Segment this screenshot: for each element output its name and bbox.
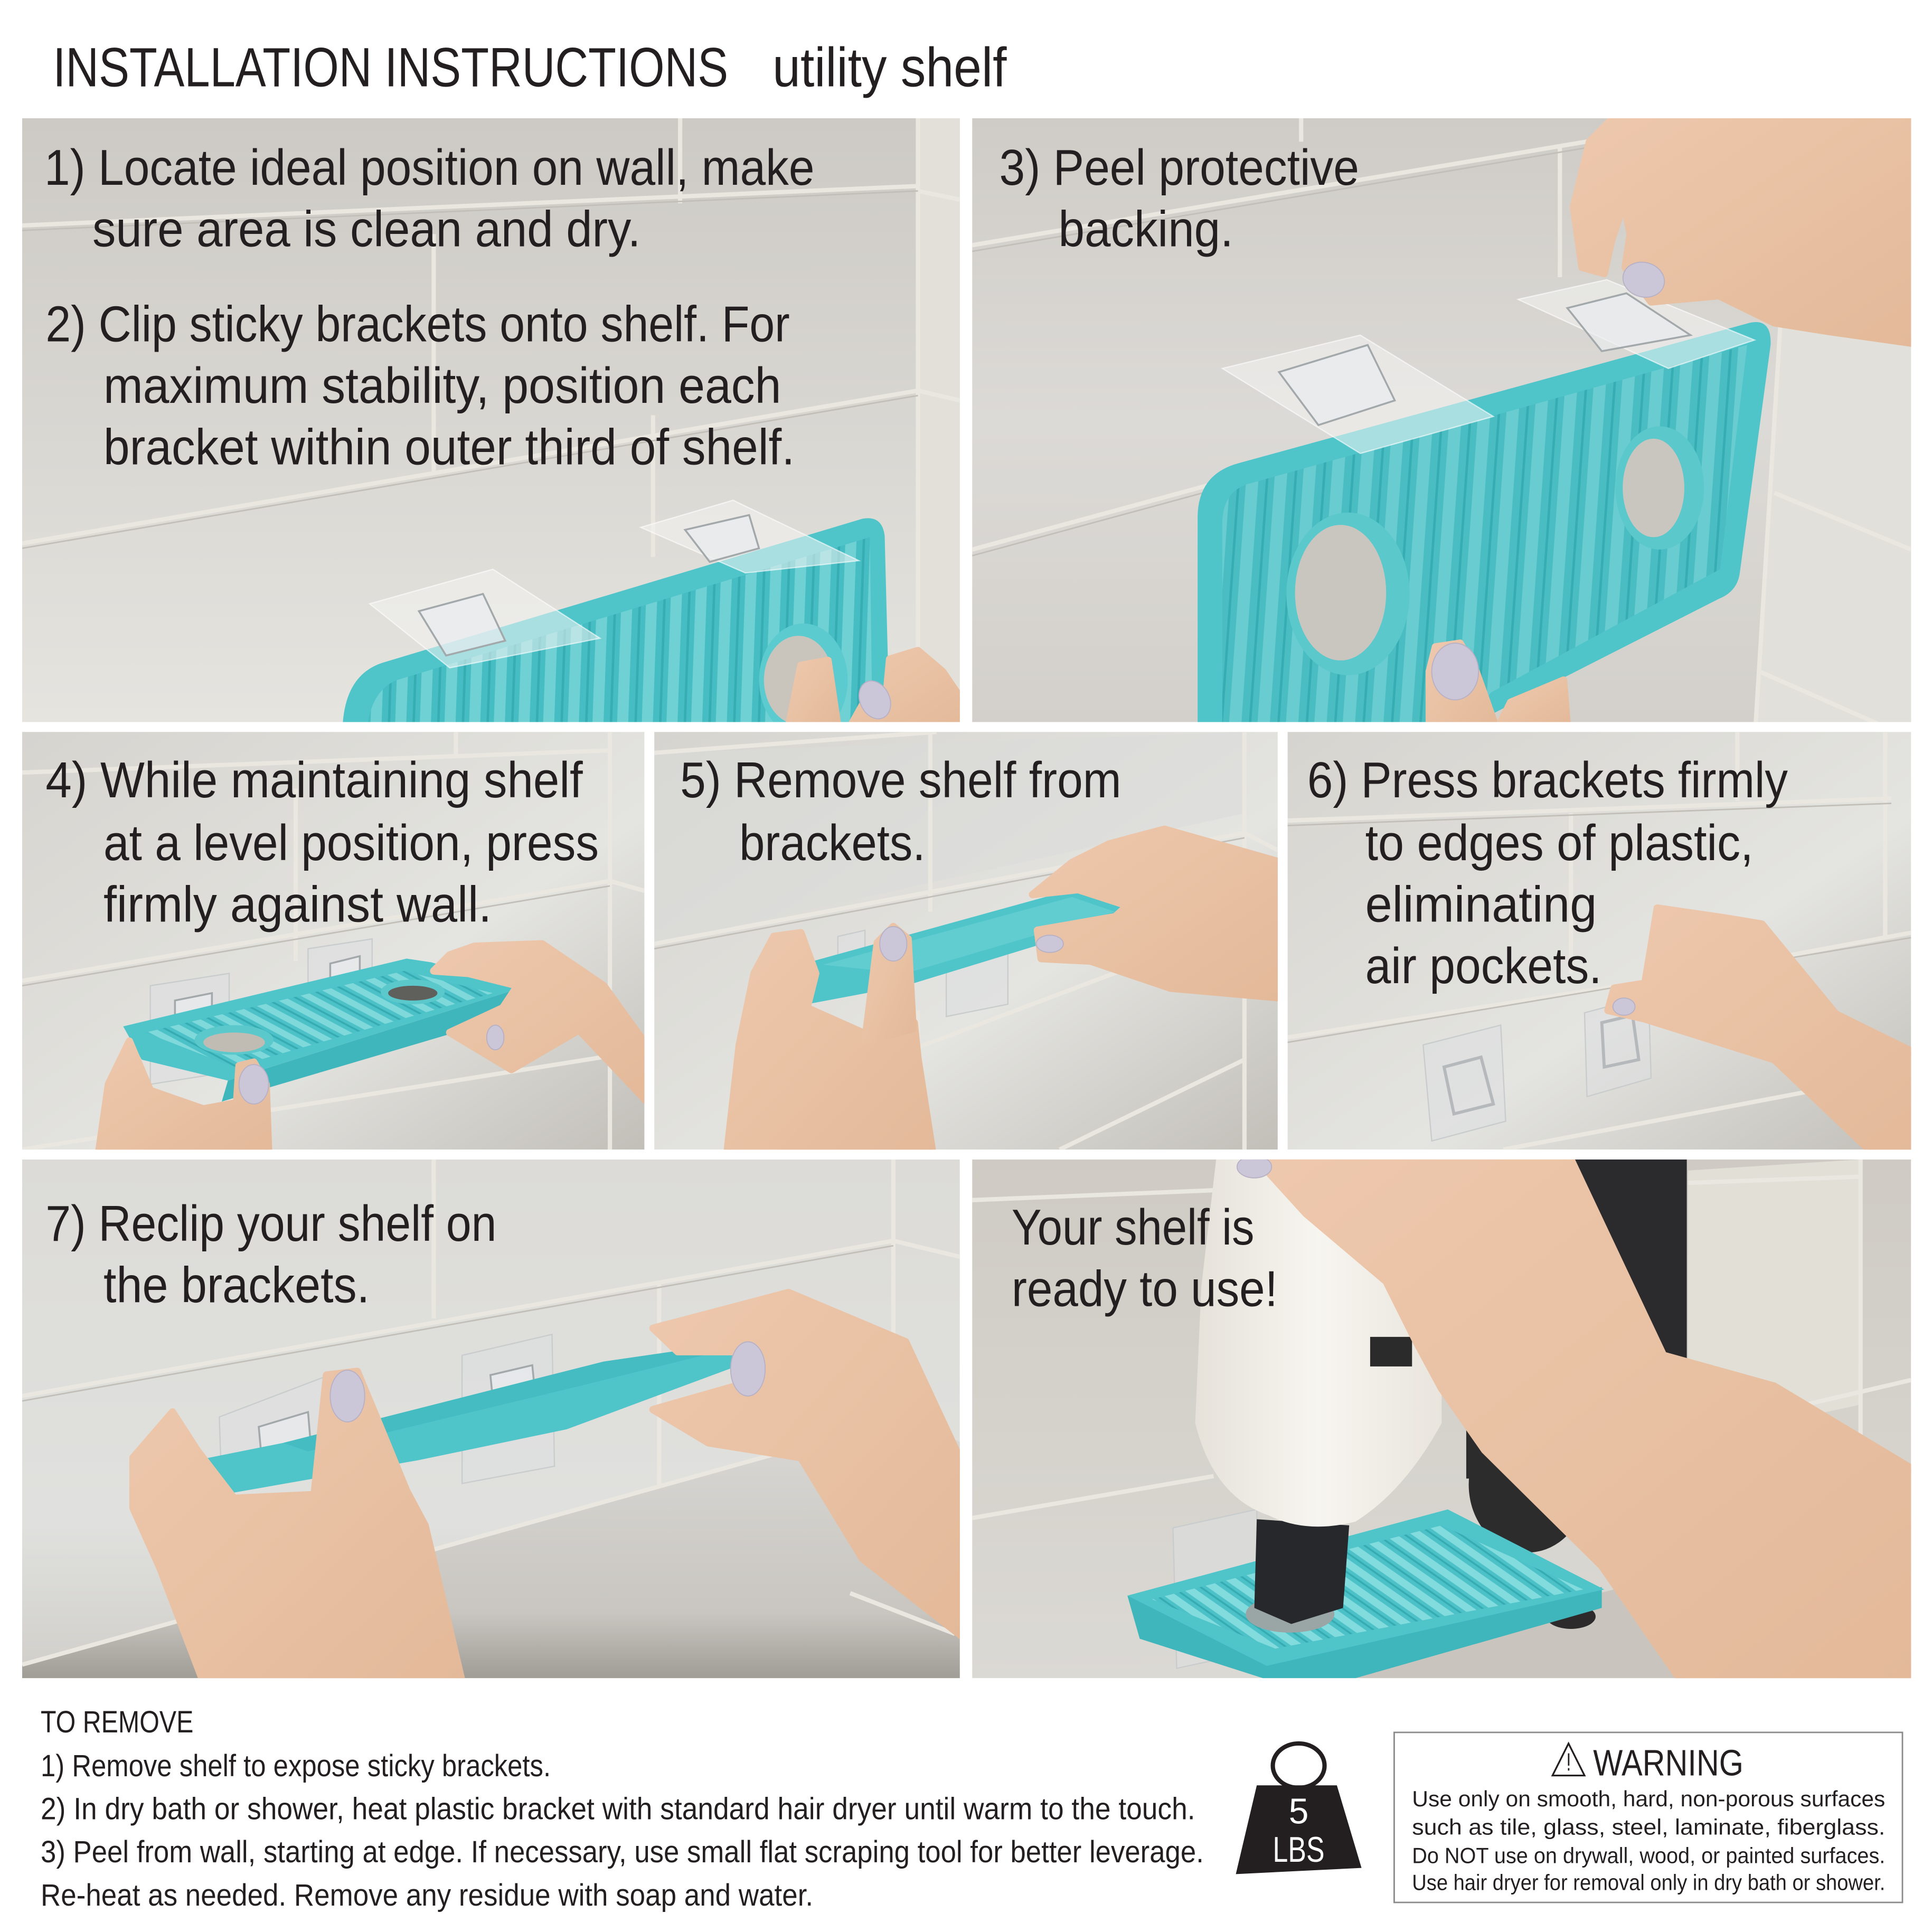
text: step 4: at a level position, press [103, 815, 599, 871]
text: step 4: firmly against wall. [103, 876, 492, 932]
warning text: Use only on smooth, hard, non-porous surfaces [1412, 1786, 1885, 1811]
text: ready to use [1012, 1199, 1278, 1317]
text: steps 1 and 2: 1) Locate ideal position on wall, make [44, 139, 814, 196]
photo: left hand [133, 1370, 462, 1682]
photo: bracket on wall [838, 930, 1008, 1016]
text block: to remove: 2) In dry bath or shower, heat plastic bracket with standard hair dryer until warm to the touch. [41, 1792, 1195, 1826]
text: step 7: 7) Reclip your shelf on [45, 1195, 496, 1252]
text block: to remove: 1) Remove shelf to expose sticky brackets. [41, 1749, 551, 1783]
text: step 6 [1307, 752, 1788, 994]
photo: hand and arm [1237, 1156, 1916, 1682]
photo: hand peeling backing [1573, 118, 1916, 344]
photo: teal shelf with two holes [1198, 280, 1770, 727]
photo: hand pressing bracket [1608, 908, 1916, 1153]
photo: white bottle [1195, 1160, 1441, 1526]
text: steps 1 and 2: 2) Clip sticky brackets onto shelf. For [45, 296, 790, 352]
text: step 4: 4) While maintaining shelf [45, 752, 583, 808]
photo: right hand [433, 944, 648, 1103]
photo: finger under shelf [1429, 643, 1567, 727]
text: step 6: 6) Press brackets firmly [1307, 752, 1788, 808]
photo: teal shelf with bottles [1127, 1510, 1604, 1678]
text: step 6: eliminating [1365, 876, 1597, 932]
text: ready to use: ready to use! [1012, 1261, 1278, 1317]
panel: step 7 [22, 1160, 964, 1682]
text: step 5: 5) Remove shelf from [680, 752, 1121, 808]
text: step 6: to edges of plastic, [1365, 815, 1754, 871]
text: steps 1 and 2 [44, 139, 814, 476]
photo: left hand [727, 932, 932, 1153]
panel: steps 1 and 2 [22, 118, 964, 737]
text: steps 1 and 2: maximum stability, position each [103, 357, 781, 414]
text block: to remove [41, 1705, 1204, 1912]
icon: 5 lbs weight: 5 [1289, 1792, 1308, 1832]
photo: dark bottle [1466, 1160, 1687, 1629]
panel: step 3 [972, 118, 1916, 727]
warning text: Do NOT use on drywall, wood, or painted surfaces. [1412, 1843, 1885, 1868]
panel: step 4 [22, 732, 648, 1153]
photo: finger with nail [865, 927, 913, 1041]
text: step 4 [45, 752, 599, 932]
text: step 7 [45, 1195, 496, 1314]
text: step 7: the brackets. [103, 1257, 370, 1314]
icon: warning triangle [1552, 1743, 1585, 1776]
photo: black bottle cap [1255, 1519, 1349, 1624]
photo: hand holding shelf [788, 651, 964, 727]
warning heading: WARNING [1593, 1742, 1743, 1784]
text: step 3 [1000, 139, 1359, 258]
warning box [1394, 1732, 1902, 1902]
photo: right hand [653, 1293, 964, 1637]
photo: left hand [99, 1041, 269, 1153]
text: ready to use: Your shelf is [1012, 1199, 1255, 1256]
icon: 5 lbs weight [1236, 1743, 1362, 1874]
text block: to remove: 3) Peel from wall, starting at edge. If necessary, use small flat scraping tool for better leverage. [41, 1835, 1204, 1869]
text: step 3: backing. [1059, 201, 1233, 258]
photo: teal shelf with brackets [343, 500, 890, 737]
icon: 5 lbs weight: LBS [1273, 1830, 1325, 1870]
text: step 5: brackets. [739, 815, 925, 871]
photo: teal shelf being reclipped [197, 1336, 783, 1496]
warning text: such as tile, glass, steel, laminate, fiberglass. [1412, 1815, 1885, 1840]
text: step 5 [680, 752, 1121, 871]
photo: right hand [1033, 829, 1281, 998]
photo: teal shelf held level [123, 958, 520, 1101]
text: steps 1 and 2: sure area is clean and dry. [92, 201, 640, 258]
photo: teal shelf being removed [807, 890, 1124, 1004]
panel: step 5 [654, 732, 1281, 1153]
title: INSTALLATION INSTRUCTIONS [53, 36, 728, 98]
photo: bracket behind bottle [1173, 1510, 1257, 1669]
text block: to remove: TO REMOVE [41, 1705, 193, 1739]
photo: installed bracket right [1585, 996, 1651, 1097]
text: step 6: air pockets. [1365, 938, 1602, 994]
photo: installed bracket left [1423, 1025, 1506, 1141]
photo: brackets behind shelf [150, 939, 372, 1085]
warning text: Use hair dryer for removal only in dry bath or shower. [1412, 1870, 1885, 1895]
text block: to remove: Re-heat as needed. Remove any residue with soap and water. [41, 1878, 813, 1912]
photo: brackets on wall [219, 1334, 554, 1491]
panel: step 6 [1288, 732, 1916, 1153]
text: steps 1 and 2: bracket within outer third of shelf. [103, 419, 795, 476]
warning text [1412, 1786, 1885, 1895]
text: step 3: 3) Peel protective [1000, 139, 1359, 196]
title: utility shelf [772, 36, 1007, 98]
panel: ready to use [972, 1156, 1916, 1682]
